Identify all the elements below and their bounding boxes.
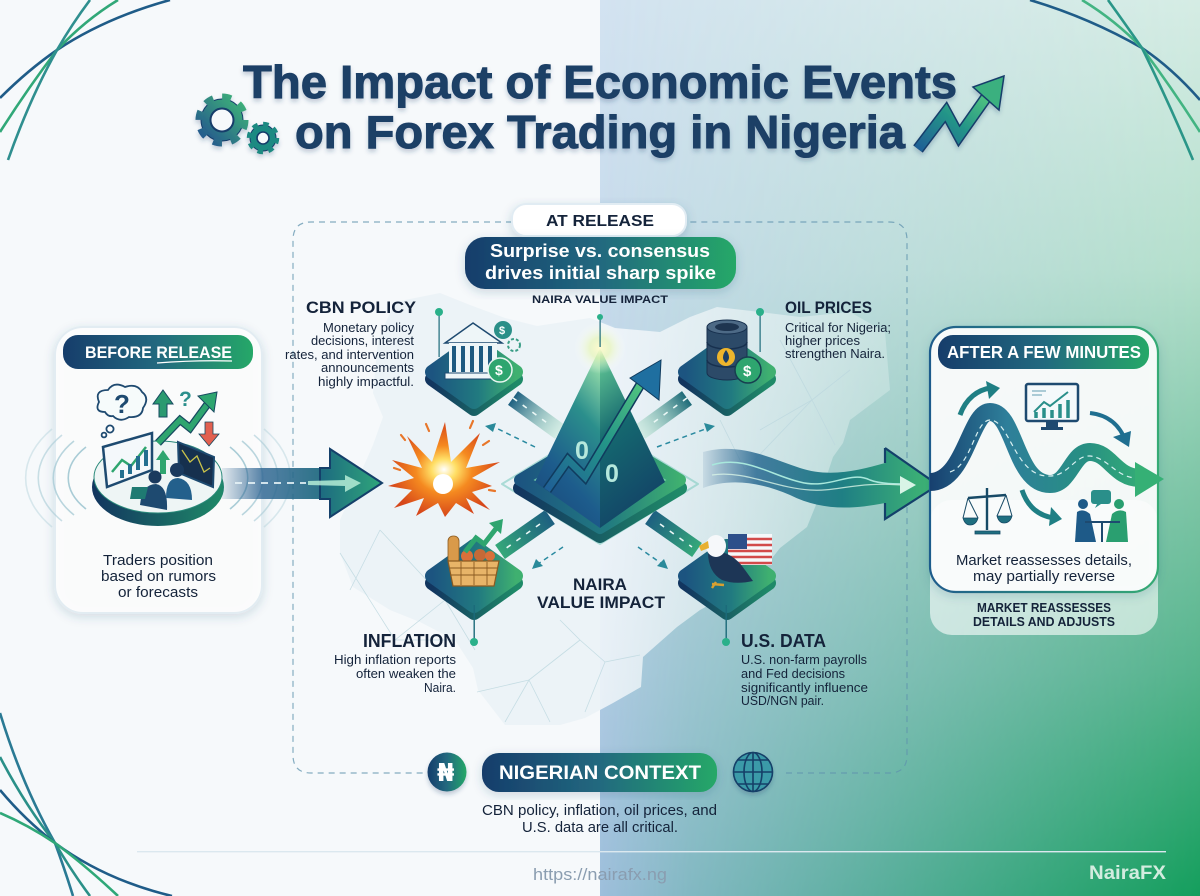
text: cbn policy: decisions, interest [311, 333, 414, 348]
text: u.s. data: and Fed decisions [741, 666, 845, 681]
icon: central pyramid on platform [502, 322, 698, 544]
text: after description: Market reassesses details, [956, 553, 1132, 569]
icon: central pyramid on platform: 0 [575, 437, 589, 465]
text: cbn policy: CBN POLICY [306, 298, 417, 317]
text: before release description [101, 553, 216, 601]
title: on Forex Trading in Nigeria [295, 106, 905, 158]
background split [600, 0, 1200, 896]
panel: before release [26, 327, 290, 613]
pill: surprise vs consensus [465, 237, 736, 289]
text: oil prices: OIL PRICES [785, 298, 872, 317]
text: u.s. data: U.S. DATA [741, 631, 826, 651]
icon: oil barrel: $ [743, 363, 752, 380]
platform: inflation [432, 519, 516, 613]
text: nigerian context description: U.S. data are all critical. [522, 820, 678, 836]
label: naira value impact centre [537, 575, 666, 612]
heading: before release [63, 335, 253, 369]
text: nigerian context description [482, 803, 717, 836]
icon: naira coin [428, 752, 466, 792]
icon: bank [445, 321, 520, 382]
pin lines [435, 308, 764, 646]
icon: explosion [388, 421, 500, 517]
heading: after a few minutes [938, 335, 1149, 369]
icon: bank: $ [495, 362, 503, 378]
icon: trader desk with radiating rings: ? [179, 388, 192, 411]
pill: nigerian context: NIGERIAN CONTEXT [499, 763, 701, 784]
text: oil prices: higher prices [785, 333, 860, 348]
text: cbn policy: announcements [321, 360, 414, 375]
text: inflation: Naira. [424, 680, 456, 695]
heading: before release: BEFORE RELEASE [85, 343, 232, 362]
icon: naira coin: ₦ [437, 758, 454, 787]
icon: curved arrow down [1090, 413, 1131, 447]
text: u.s. data [741, 631, 868, 708]
text: u.s. data: U.S. non-farm payrolls [741, 652, 867, 667]
text: oil prices: Critical for Nigeria; [785, 320, 891, 335]
lower caption panel [930, 500, 1158, 635]
text: cbn policy: highly impactful. [318, 374, 414, 389]
pill: nigerian context [482, 753, 717, 792]
pill: surprise vs consensus: drives initial sharp spike [485, 263, 716, 283]
pill: at release [512, 204, 686, 236]
platform: u.s. data [685, 534, 772, 613]
pill: at release: AT RELEASE [546, 213, 654, 230]
icon: meeting [1075, 490, 1128, 542]
text: cbn policy: rates, and intervention [285, 347, 414, 362]
text: inflation: often weaken the [356, 666, 456, 681]
text: cbn policy [285, 298, 417, 389]
label: naira value impact centre: NAIRA [573, 575, 627, 594]
icon: curved arrow right [1022, 490, 1062, 526]
platform: cbn policy [432, 321, 520, 409]
icon: bank: $ [499, 325, 505, 337]
text: nigerian context description: CBN policy, inflation, oil prices, and [482, 803, 717, 819]
text: after description [956, 553, 1132, 585]
icon: market wave arrow [930, 412, 1164, 497]
footer: https://nairafx.ng [533, 865, 667, 884]
text: after description: may partially reverse [973, 569, 1115, 585]
icon: gears [199, 97, 277, 152]
icon: eagle and flag [699, 534, 772, 588]
icon: globe [734, 752, 772, 792]
icon: trader desk with radiating rings: ? [114, 389, 130, 419]
footer [137, 851, 1166, 884]
title [243, 56, 957, 158]
text: cbn policy: Monetary policy [323, 320, 414, 335]
footer: NairaFX [1089, 863, 1166, 884]
icon: central pyramid on platform: 0 [605, 460, 619, 488]
text: before release description: or forecasts [118, 585, 198, 601]
icon: monitor chart [1026, 384, 1078, 430]
icon: trader desk with radiating rings [26, 385, 290, 527]
text: oil prices [785, 298, 891, 361]
icon: scales [963, 488, 1012, 534]
icon: food basket [448, 519, 503, 586]
connectors to central pyramid [485, 398, 715, 569]
platform: oil prices [685, 320, 769, 409]
pill: surprise vs consensus: Surprise vs. consensus [490, 241, 710, 261]
icon: curved arrow up [960, 381, 1000, 415]
text: before release description: Traders position [103, 553, 213, 569]
nigeria map backdrop [340, 293, 890, 725]
text: inflation [334, 631, 457, 695]
text: inflation: High inflation reports [334, 652, 457, 667]
dashed frame: at release [293, 222, 907, 773]
title: The Impact of Economic Events [243, 56, 957, 108]
lower caption panel: MARKET REASSESSES [977, 601, 1111, 615]
arrow: before to release [222, 449, 382, 517]
icon: title growth arrow [918, 76, 1004, 149]
text: oil prices: strengthen Naira. [785, 346, 885, 361]
heading: after a few minutes: AFTER A FEW MINUTES [947, 342, 1141, 362]
panel: after a few minutes [930, 327, 1164, 635]
label: naira value impact centre: VALUE IMPACT [537, 593, 666, 612]
lower caption panel: DETAILS AND ADJUSTS [973, 615, 1115, 629]
text: u.s. data: USD/NGN pair. [741, 693, 824, 708]
text: u.s. data: significantly influence [741, 680, 868, 695]
text: before release description: based on rumors [101, 569, 216, 585]
arrow: release to after [703, 448, 938, 519]
text: inflation: INFLATION [363, 631, 456, 651]
label: naira value impact top: NAIRA VALUE IMPACT [532, 294, 668, 306]
